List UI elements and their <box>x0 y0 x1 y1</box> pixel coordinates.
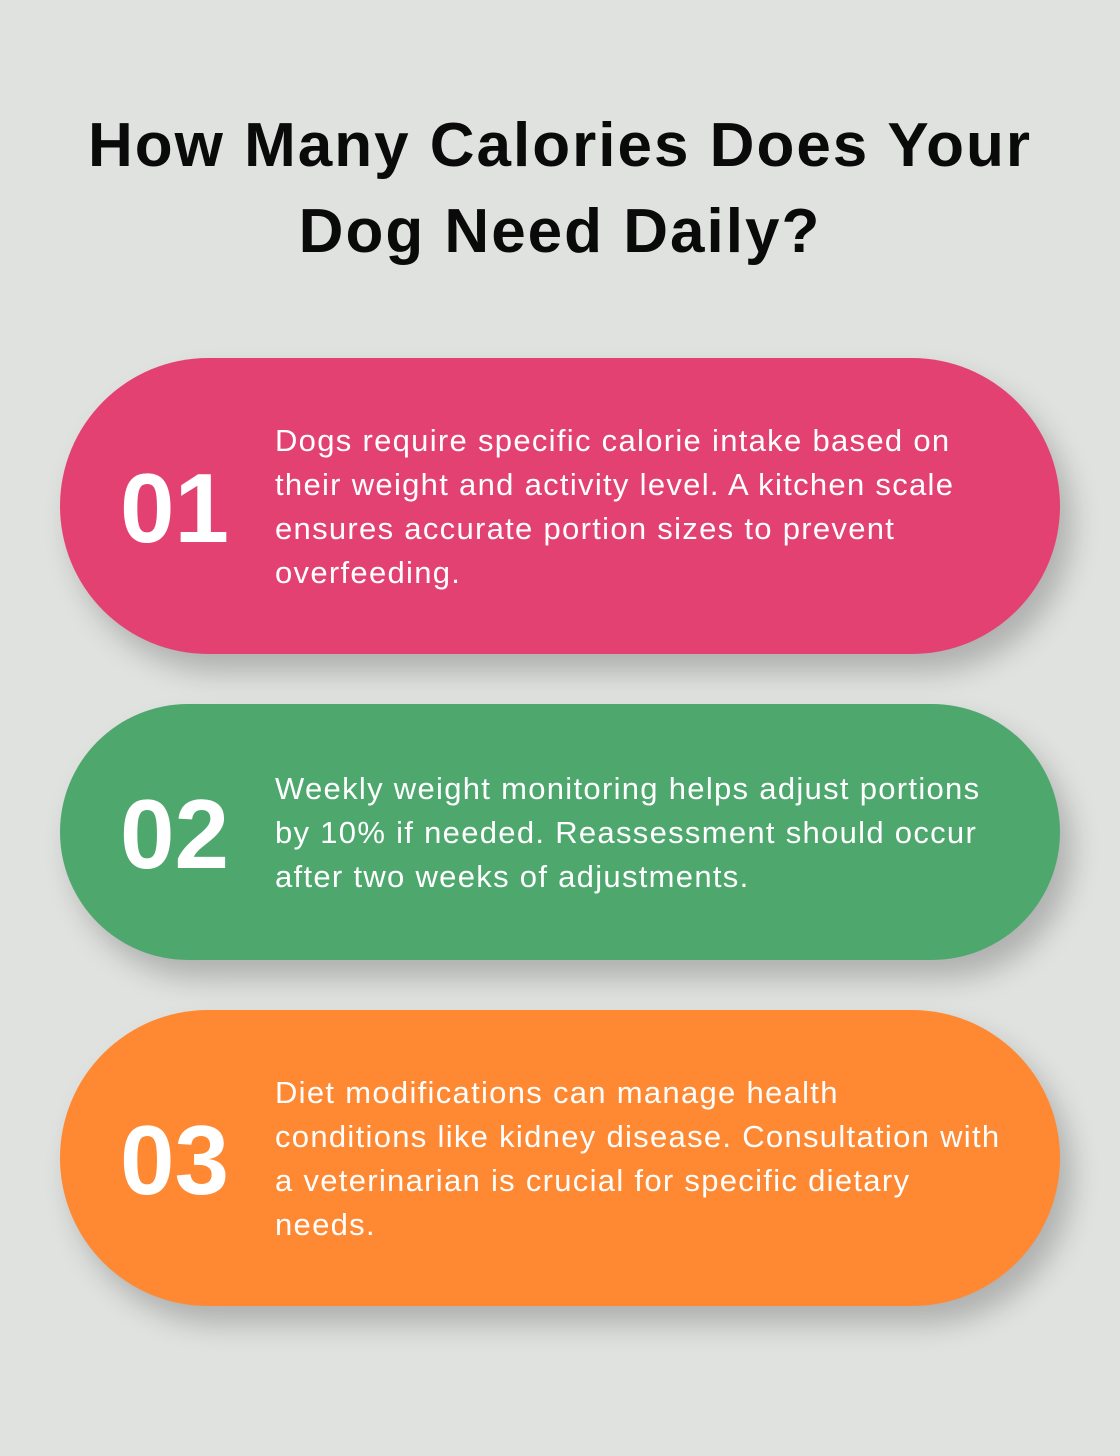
number 01: 01 <box>120 453 229 563</box>
text 03 <box>275 1075 1000 1242</box>
title: Dog Need Daily? <box>299 197 821 266</box>
text 03: conditions like kidney disease. Consultation with <box>275 1119 1000 1154</box>
number 03: 03 <box>120 1105 229 1215</box>
text 02: after two weeks of adjustments. <box>275 859 750 894</box>
text 02: Weekly weight monitoring helps adjust portions <box>275 771 980 806</box>
text 01: Dogs require specific calorie intake based on <box>275 423 950 458</box>
panel: step 01 <box>60 358 1060 654</box>
title: How Many Calories Does Your <box>88 111 1032 180</box>
text 01: ensures accurate portion sizes to prevent <box>275 511 895 546</box>
text 01: their weight and activity level. A kitchen scale <box>275 467 954 502</box>
text 03: a veterinarian is crucial for specific dietary <box>275 1163 910 1198</box>
title <box>88 111 1032 266</box>
panel: step 03 <box>60 1010 1060 1306</box>
text 03: Diet modifications can manage health <box>275 1075 839 1110</box>
number 02: 02 <box>120 779 229 889</box>
text 01 <box>275 423 954 590</box>
text 02 <box>275 771 980 894</box>
text 03: needs. <box>275 1207 376 1242</box>
text 02: by 10% if needed. Reassessment should occur <box>275 815 977 850</box>
text 01: overfeeding. <box>275 555 461 590</box>
panel: step 02 <box>60 704 1060 960</box>
